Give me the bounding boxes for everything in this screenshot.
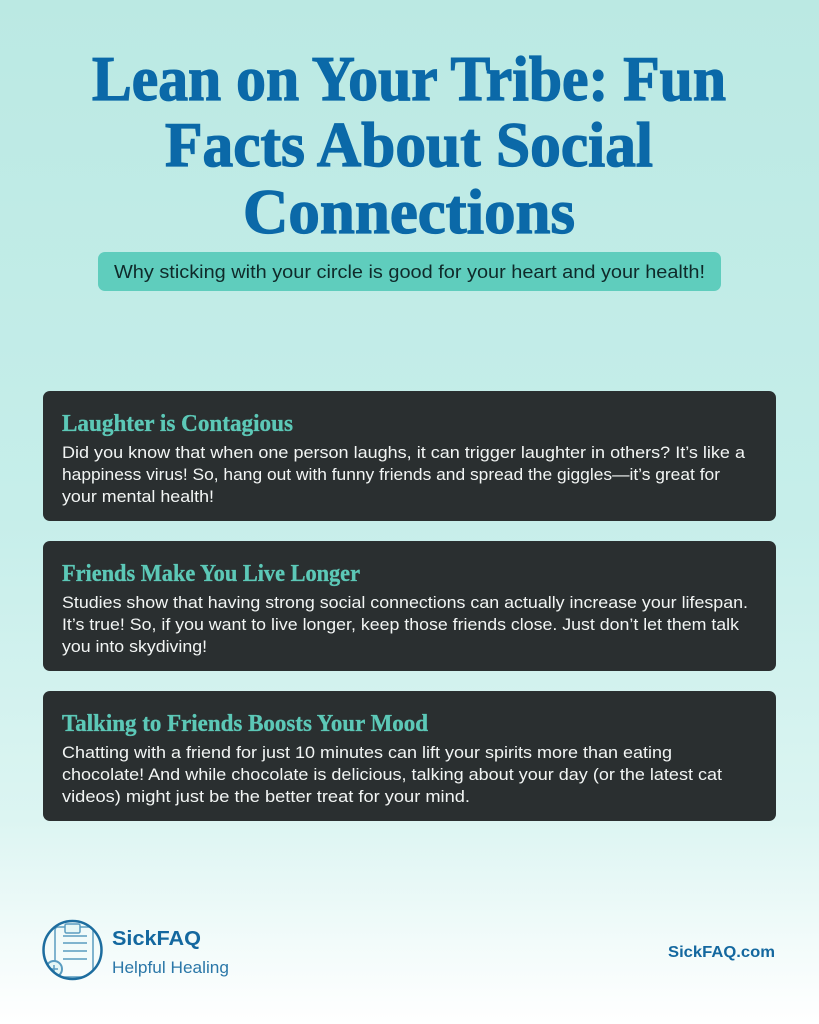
tagline: Helpful Healing xyxy=(112,959,229,977)
body text: friends xyxy=(62,593,748,656)
panel: Laughter is Contagious xyxy=(43,391,776,521)
body text: laughter: Did you know that when one person laughs, it can trigger laughter in others? It’s like a xyxy=(62,443,746,462)
body text: talking: chocolate! And while chocolate is delicious, talking about your day (or the latest cat xyxy=(62,765,722,784)
subtitle banner: Why sticking with your circle is good for your heart and your health! xyxy=(114,261,705,282)
body text: laughter: your mental health! xyxy=(62,487,214,506)
panel: Friends Make You Live Longer xyxy=(43,541,776,671)
body text: talking xyxy=(62,743,722,806)
title: Connections xyxy=(243,176,575,247)
body text: laughter xyxy=(62,443,746,506)
title xyxy=(92,43,726,247)
body text: talking: Chatting with a friend for just 10 minutes can lift your spirits more than eating xyxy=(62,743,672,762)
body text: friends: It’s true! So, if you want to live longer, keep those friends close. Just don’t let them talk xyxy=(62,615,740,634)
website: SickFAQ.com xyxy=(668,944,775,961)
body text: talking: videos) might just be the better treat for your mind. xyxy=(62,787,470,806)
body text: friends: you into skydiving! xyxy=(62,637,207,656)
panel: Talking to Friends Boosts Your Mood xyxy=(43,691,776,821)
heading: Laughter is Contagious: Laughter is Contagious xyxy=(62,411,293,437)
body text: friends: Studies show that having strong social connections can actually increase your lifespan. xyxy=(62,593,748,612)
subtitle banner xyxy=(98,252,721,291)
body text: laughter: happiness virus! So, hang out with funny friends and spread the giggles—it’s great for xyxy=(62,465,720,484)
heading: Talking to Friends Boosts Your Mood: Talking to Friends Boosts Your Mood xyxy=(62,711,429,737)
icon: clipboard logo xyxy=(44,921,102,979)
heading: Friends Make You Live Longer: Friends Make You Live Longer xyxy=(62,561,360,587)
title: Lean on Your Tribe: Fun xyxy=(92,43,726,114)
title: Facts About Social xyxy=(165,109,653,180)
brand name: SickFAQ xyxy=(112,928,201,950)
